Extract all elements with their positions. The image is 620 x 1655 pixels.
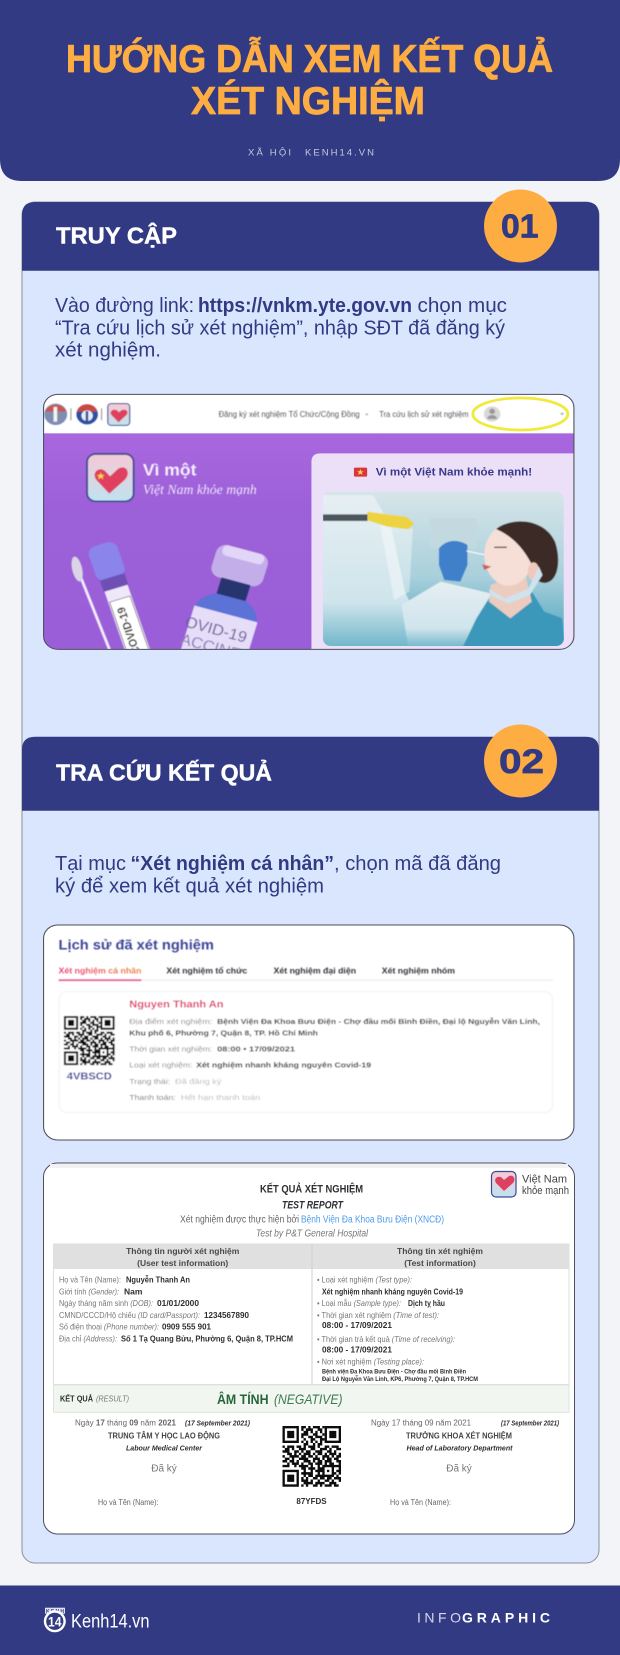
report QR code — [282, 1426, 341, 1506]
step 02 title: TRA CỨU KẾT QUẢ — [56, 758, 272, 786]
user avatar — [484, 406, 500, 422]
test information: Dịch tỵ hầu — [408, 1298, 445, 1308]
subtitle: source: XÃ HỘI — [248, 148, 291, 158]
test record card — [59, 992, 552, 1113]
result row: ÂM TÍNH — [217, 1390, 268, 1407]
yellow highlight ellipse — [473, 398, 568, 430]
record details: Bệnh Viện Đa Khoa Bưu Điện - Chợ đầu mối Bình Điền, Đại lộ Nguyễn Văn Linh, — [217, 1017, 540, 1026]
step 02 badge — [484, 724, 557, 798]
record details: Địa điểm xét nghiệm: — [129, 1017, 212, 1026]
screenshot: test history — [44, 925, 574, 1140]
user information: 01/01/2000 — [157, 1298, 199, 1308]
icon: Kenh14 logo: 14 — [48, 1613, 62, 1629]
record details: Xét nghiệm nhanh kháng nguyên Covid-19 — [196, 1061, 372, 1070]
result row: (RESULT) — [96, 1394, 129, 1404]
app name: Vì một — [143, 460, 197, 480]
screenshot: website home page — [43, 394, 574, 650]
user information: Nguyễn Thanh An — [126, 1274, 190, 1284]
user information: Số điện thoại (Phone number): — [59, 1322, 159, 1332]
user information: CMND/CCCD/Hộ chiếu (ID card/Passport): — [59, 1310, 200, 1320]
user information: Ngày tháng năm sinh (DOB): — [59, 1298, 153, 1308]
report logo — [492, 1172, 569, 1197]
side card — [311, 453, 576, 652]
text block: step 02 instructions: Tại mục — [55, 853, 126, 875]
text block: step 01 instructions: chọn mục — [418, 295, 507, 317]
history title: Lịch sử đã xét nghiệm — [59, 938, 214, 953]
report logo: Việt Nam — [522, 1174, 567, 1186]
left signature: Labour Medical Center — [126, 1444, 203, 1452]
information table: (Test information) — [404, 1258, 476, 1268]
panel: step 01 heading — [22, 190, 599, 271]
user information: Địa chỉ (Address): — [59, 1334, 117, 1344]
report heading: Xét nghiệm được thực hiện bởi — [180, 1214, 299, 1226]
text block: step 02 instructions: ký để xem kết quả xét nghiệm — [55, 875, 324, 897]
user information — [59, 1274, 293, 1344]
user information: 1234567890 — [204, 1310, 249, 1320]
infographic tag — [417, 1610, 550, 1626]
information table: Thông tin người xét nghiệm — [126, 1246, 240, 1256]
report heading: Test by P&T General Hospital — [256, 1228, 369, 1240]
text block: step 01 instructions: “Tra cứu lịch sử xét nghiệm”, nhập SĐT đã đăng ký — [55, 318, 505, 340]
test information: • Loại xét nghiệm (Test type): — [317, 1274, 412, 1284]
step 01 badge: 01 — [501, 208, 538, 244]
record details — [129, 1000, 540, 1102]
navigation links: Tra cứu lịch sử xét nghiệm — [379, 409, 469, 419]
record details: Khu phố 6, Phường 7, Quận 8, TP. Hồ Chí Minh — [129, 1029, 318, 1037]
app logo — [87, 454, 134, 501]
brand name: Kenh14.vn — [71, 1611, 150, 1633]
step 02 badge: 02 — [499, 743, 544, 781]
right signature: Đã ký — [446, 1464, 472, 1474]
report heading — [180, 1183, 444, 1240]
icon: Kenh14 logo: KENH — [46, 1609, 64, 1615]
title — [66, 37, 553, 123]
panel: main content background — [22, 202, 599, 1563]
test information: • Loại mẫu (Sample type): — [317, 1298, 401, 1308]
record details: Nguyen Thanh An — [129, 1000, 224, 1010]
record details: Đã đăng ký — [175, 1077, 221, 1086]
navigation links — [219, 409, 469, 419]
record details: Hết hạn thanh toán — [181, 1093, 260, 1102]
text block: step 01 instructions: Vào đường link: — [55, 295, 194, 317]
text block: step 01 instructions — [55, 295, 507, 362]
header banner — [0, 0, 620, 181]
result row: (NEGATIVE) — [274, 1391, 342, 1407]
user information: Nam — [124, 1286, 143, 1296]
step 01 title: TRUY CẬP — [56, 222, 177, 248]
right signature: TRƯỞNG KHOA XÉT NGHIỆM — [406, 1430, 512, 1440]
left signature: Họ và Tên (Name): — [98, 1498, 158, 1507]
right signature — [371, 1419, 560, 1507]
navigation links: Đăng ký xét nghiệm Tổ Chức/Cộng Đồng — [219, 409, 360, 419]
test information: • Nơi xét nghiệm (Testing place): — [317, 1357, 424, 1367]
record details: Thời gian xét nghiệm: — [129, 1045, 212, 1054]
test tube — [88, 542, 150, 649]
vaccine vial — [180, 544, 268, 649]
record details: Loại xét nghiệm: — [129, 1061, 192, 1070]
left signature — [75, 1419, 251, 1507]
record details: 08:00 • 17/09/2021 — [217, 1045, 296, 1054]
left signature: Đã ký — [151, 1464, 177, 1474]
vaccine vial: OVID-19 — [183, 614, 249, 646]
side card title: Vì một Việt Nam khỏe mạnh! — [376, 467, 532, 479]
test information: Đại Lộ Nguyễn Văn Linh, KP6, Phường 7, Quận 8, TP.HCM — [322, 1374, 478, 1383]
report heading: KẾT QUẢ XÉT NGHIỆM — [260, 1183, 363, 1196]
user information: Họ và Tên (Name): — [59, 1274, 121, 1284]
vaccine vial: ACCINE — [178, 631, 243, 663]
right signature: Head of Laboratory Department — [406, 1444, 513, 1452]
infographic tag: GRAPHIC — [462, 1610, 550, 1626]
right signature: Họ và Tên (Name): — [390, 1498, 451, 1507]
cotton swab — [69, 556, 110, 652]
test information: Bệnh viện Đa Khoa Bưu Điện - Chợ đầu mối Bình Điền — [322, 1366, 466, 1375]
report logo: khỏe mạnh — [522, 1185, 569, 1197]
record details: Trạng thái: — [129, 1077, 170, 1086]
QR code — [64, 1016, 115, 1065]
icon: Kenh14 logo — [44, 1608, 66, 1632]
tabs: Xét nghiệm tổ chức — [166, 966, 247, 975]
tabs: Xét nghiệm cá nhân — [59, 966, 141, 975]
information table: Thông tin xét nghiệm — [397, 1246, 483, 1256]
information table: (User test information) — [137, 1258, 228, 1268]
footer — [0, 1586, 620, 1655]
step 01 badge — [484, 190, 557, 262]
text block: step 02 instructions: , chọn mã đã đăng — [334, 853, 501, 875]
text block: step 01 instructions: https://vnkm.yte.gov.vn — [198, 295, 412, 317]
test information: • Thời gian trả kết quả (Time of receiving): — [317, 1334, 455, 1344]
information table — [54, 1244, 569, 1384]
subtitle: source — [248, 148, 374, 158]
navigation logos — [44, 404, 130, 425]
subtitle: source: KENH14.VN — [305, 148, 374, 158]
report QR code: 87YFDS — [296, 1497, 327, 1506]
title: XÉT NGHIỆM — [191, 79, 425, 123]
user information: 0909 555 901 — [162, 1322, 211, 1332]
text block: step 02 instructions: “Xét nghiệm cá nhân” — [130, 853, 334, 875]
screenshot: test report — [44, 1163, 574, 1534]
photo: swab test — [323, 492, 566, 648]
tabs — [59, 966, 553, 981]
text block: step 01 instructions: xét nghiệm. — [55, 340, 161, 362]
infographic tag: INFO — [417, 1610, 461, 1626]
left signature: TRUNG TÂM Y HỌC LAO ĐỘNG — [108, 1430, 220, 1440]
right signature: (17 September 2021) — [501, 1421, 560, 1428]
record details: Thanh toán: — [129, 1093, 176, 1102]
test information: • Thời gian xét nghiệm (Time of test): — [317, 1310, 439, 1320]
report heading: Bệnh Viện Đa Khoa Bưu Điện (XNCĐ) — [301, 1214, 444, 1226]
test information: 08:00 - 17/09/2021 — [322, 1320, 392, 1330]
right signature: Ngày 17 tháng 09 năm 2021 — [371, 1419, 472, 1428]
user information: Số 1 Tạ Quang Bửu, Phường 6, Quận 8, TP.HCM — [121, 1334, 293, 1344]
report heading: TEST REPORT — [282, 1200, 344, 1212]
test information: 08:00 - 17/09/2021 — [322, 1344, 392, 1354]
user information: Giới tính (Gender): — [59, 1286, 119, 1296]
hero background — [44, 433, 574, 650]
result row — [54, 1385, 569, 1412]
tabs: Xét nghiệm đại diện — [274, 966, 356, 975]
title: HƯỚNG DẪN XEM KẾT QUẢ — [66, 37, 553, 81]
test information — [317, 1274, 478, 1383]
panel: step 02 heading — [22, 724, 599, 811]
result row: KẾT QUẢ — [60, 1392, 93, 1404]
left signature: Ngày 17 tháng 09 năm 2021 — [75, 1419, 177, 1428]
screenshot: website home page: Việt Nam khỏe mạnh — [143, 482, 257, 497]
left signature: (17 September 2021) — [185, 1421, 251, 1428]
test record card: 4VBSCD — [67, 1072, 112, 1082]
text block: step 02 instructions — [55, 853, 501, 897]
tabs: Xét nghiệm nhóm — [382, 966, 455, 975]
test tube: COVID-19 — [115, 605, 143, 656]
test information: Xét nghiệm nhanh kháng nguyên Covid-19 — [322, 1286, 463, 1296]
